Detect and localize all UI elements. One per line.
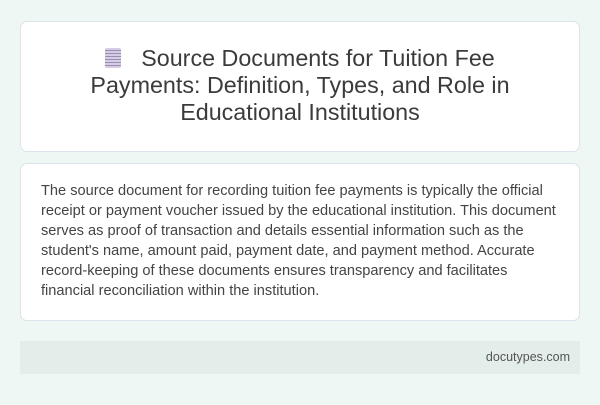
text block: serves as proof of transaction and details essential information such as the bbox=[41, 223, 524, 239]
footer: docutypes.com bbox=[486, 350, 570, 364]
title: Educational Institutions bbox=[180, 99, 420, 125]
text block: The source document for recording tuition fee payments is typically the official bbox=[41, 183, 543, 199]
text block: financial reconciliation within the institution. bbox=[41, 283, 319, 299]
panel: description bbox=[20, 163, 580, 321]
icon: receipt bbox=[105, 48, 121, 68]
text block: student's name, amount paid, payment date, and payment method. Accurate bbox=[41, 243, 535, 259]
title bbox=[90, 45, 510, 125]
text block: receipt or payment voucher issued by the educational institution. This document bbox=[41, 203, 556, 219]
title: Payments: Definition, Types, and Role in bbox=[90, 72, 510, 98]
text block: record-keeping of these documents ensures transparency and facilitates bbox=[41, 263, 507, 279]
panel: header bbox=[20, 21, 580, 152]
footer bbox=[20, 341, 580, 374]
title: Source Documents for Tuition Fee bbox=[141, 45, 495, 71]
text block bbox=[41, 183, 556, 299]
